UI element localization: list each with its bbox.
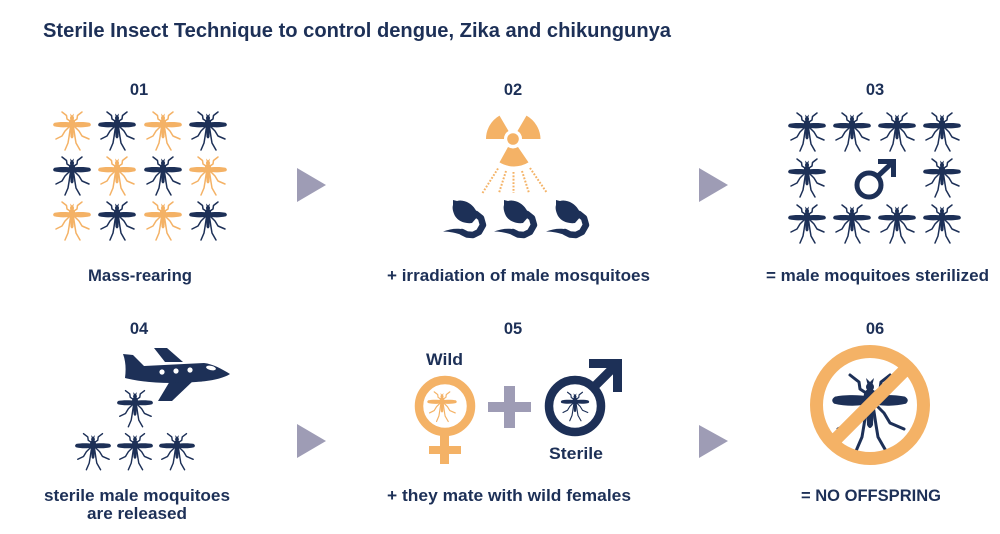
- icon: airplane: [123, 348, 230, 401]
- label: released: sterile male moquitoes: [44, 487, 230, 505]
- label: sterilized: = male moquitoes sterilized: [766, 267, 989, 285]
- title: Sterile Insect Technique to control dengue, Zika and chikungunya: [43, 20, 672, 42]
- icon: plus sign: [488, 386, 531, 428]
- label: irradiation: + irradiation of male mosquitoes: [387, 267, 650, 285]
- label: sterile: Sterile: [549, 445, 603, 463]
- arrow: step 05 to 06: [699, 425, 728, 458]
- icon: ring of mosquitoes: [788, 113, 961, 243]
- step number 01: 01: [130, 81, 148, 99]
- step number 03: 03: [866, 81, 884, 99]
- arrow: step 04 to 05: [297, 424, 326, 458]
- panel: step 06 no offspring: [801, 320, 941, 505]
- icon: released mosquitoes: [75, 391, 195, 470]
- icon: prohibited mosquito: [816, 352, 924, 458]
- icon: radiation rays: [482, 168, 547, 193]
- label: released: [44, 487, 230, 523]
- label: they mate: + they mate with wild females: [387, 487, 631, 505]
- panel: step 02 irradiation: [387, 81, 650, 285]
- panel: step 01 mass-rearing: [53, 81, 227, 285]
- label: wild: Wild: [426, 351, 463, 369]
- step number 02: 02: [504, 81, 522, 99]
- icon: male symbol with sterile mosquito: [549, 364, 618, 432]
- label: released: are released: [87, 505, 187, 523]
- panel: step 05 mating: [387, 320, 631, 505]
- label: mass-rearing: Mass-rearing: [88, 267, 192, 285]
- icon: male symbol: [857, 162, 894, 197]
- step number 06: 06: [866, 320, 884, 338]
- icon: three pupae: [443, 200, 586, 235]
- label: no offspring: = NO OFFSPRING: [801, 487, 941, 505]
- icon: mosquito grid: [53, 112, 227, 240]
- step number 04: 04: [130, 320, 149, 338]
- step number 05: 05: [504, 320, 522, 338]
- icon: radiation symbol: [486, 116, 540, 166]
- panel: step 03 sterilized: [766, 81, 989, 285]
- panel: step 04 release: [44, 320, 230, 523]
- icon: female symbol with wild mosquito: [419, 380, 471, 464]
- arrow: step 02 to 03: [699, 168, 728, 202]
- arrow: step 01 to 02: [297, 168, 326, 202]
